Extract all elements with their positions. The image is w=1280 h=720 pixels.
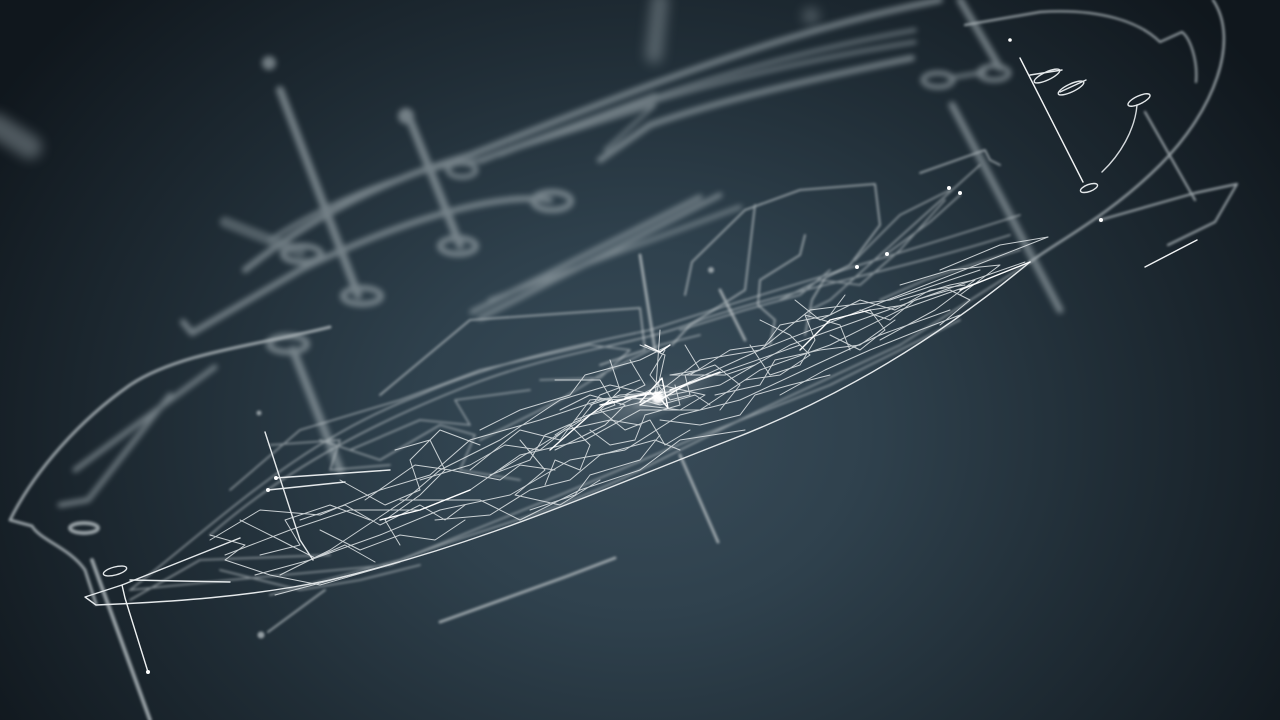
- bright core traces: [380, 262, 1030, 520]
- core hot spot: [652, 392, 664, 404]
- far blurred fragments: [0, 0, 819, 147]
- central glow: [578, 351, 732, 445]
- sharp outer curve and pins: [85, 38, 1197, 674]
- dense circuit traces: [210, 237, 1048, 595]
- upper rear blurred rails: [60, 0, 1060, 505]
- disc edge mid-focus lines: [130, 165, 1030, 600]
